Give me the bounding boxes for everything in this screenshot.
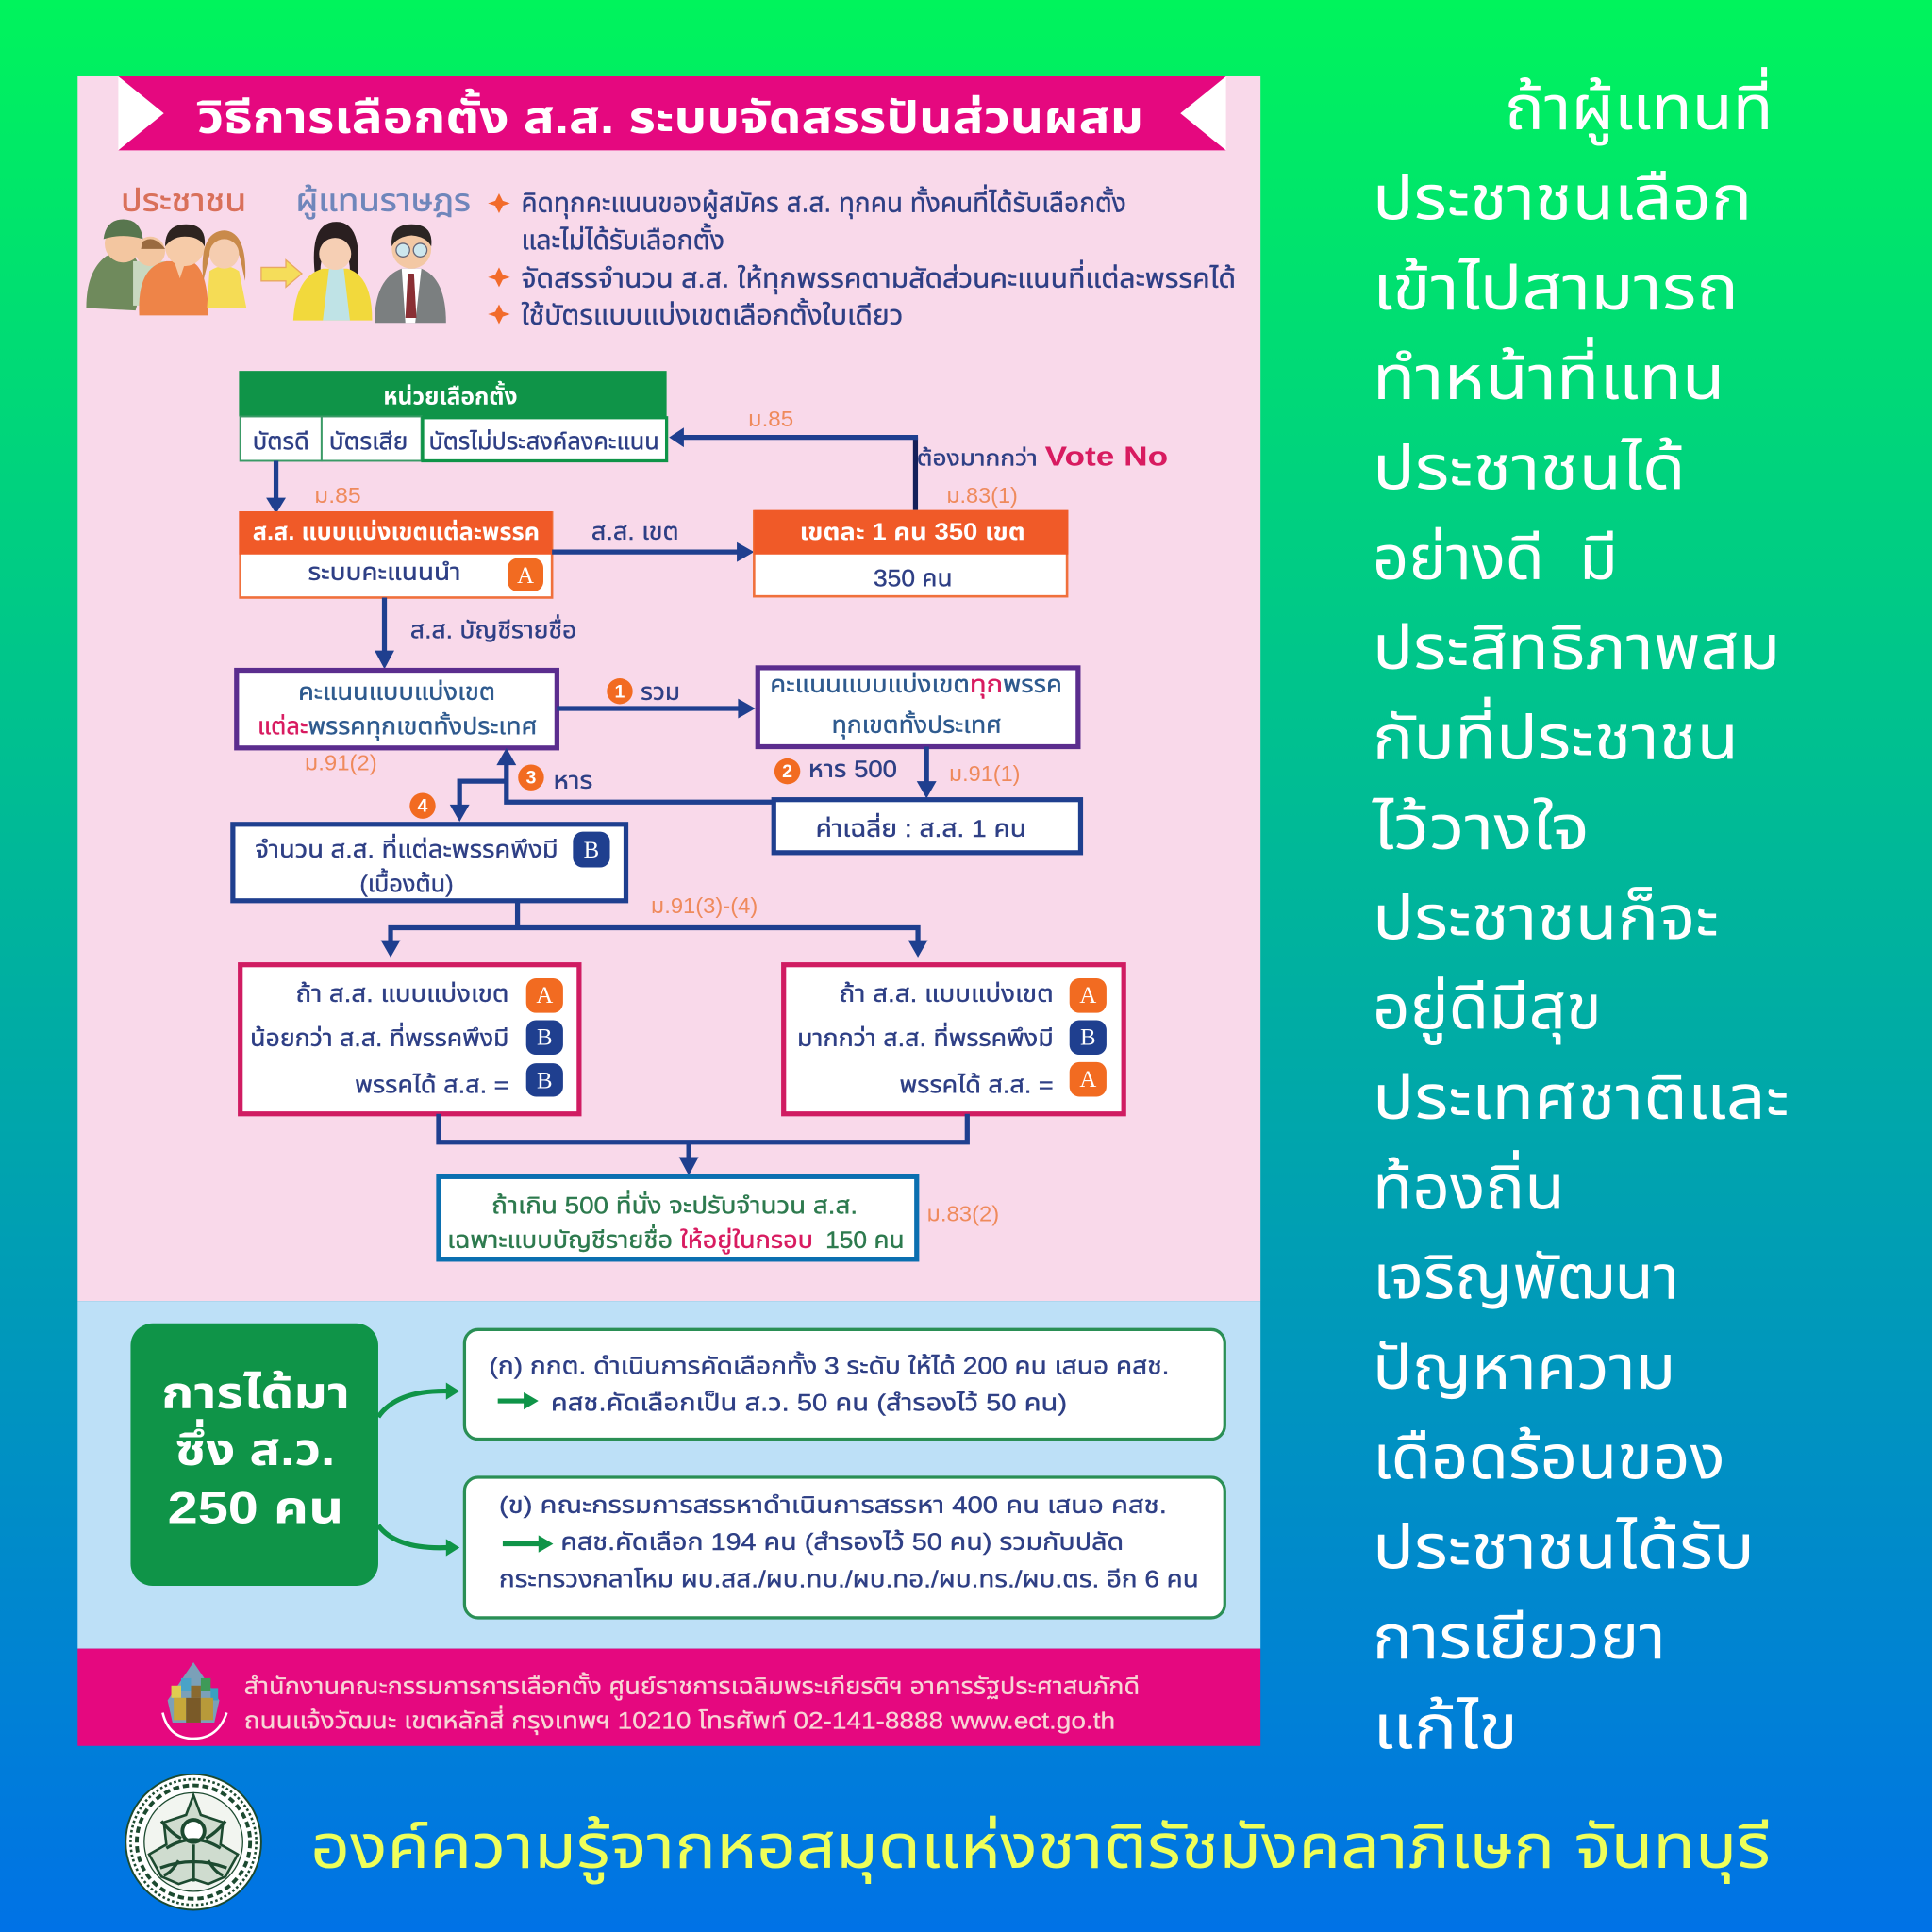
text block: right column message: อย่างดี มี <box>1373 524 1618 592</box>
label: constituency MP: ส.ส. เขต <box>591 520 679 545</box>
box: polling unit: บัตรเสีย <box>329 430 408 456</box>
panel: senate selection <box>77 1301 1260 1649</box>
box: fewer than entitled: พรรคได้ ส.ส. = <box>355 1074 508 1099</box>
arrow: to no-vote ballots <box>669 427 918 510</box>
arrow: to party-list <box>375 597 394 669</box>
arrow: average back to party votes and down <box>450 748 774 822</box>
box: entitled seats: จำนวน ส.ส. ที่แต่ละพรรคพึงมี <box>255 833 558 863</box>
box: average: ค่าเฉลี่ย : ส.ส. 1 คน <box>816 812 1026 842</box>
box: more than entitled: มากกว่า ส.ส. ที่พรรคพึงมี <box>797 1022 1054 1052</box>
box: more than entitled: ถ้า ส.ส. แบบแบ่งเขต <box>839 981 1054 1008</box>
icon: election commission logo <box>162 1662 226 1739</box>
text block: right column message: เดือดร้อนของ <box>1373 1423 1725 1491</box>
box: constituency MPs: A <box>517 563 534 589</box>
box: more than entitled <box>784 965 1124 1114</box>
label: must exceed vote no: ต้องมากกว่า <box>917 446 1038 471</box>
text block: right column message: ประชาชนได้รับ <box>1373 1513 1755 1582</box>
text block: right column message: กับที่ประชาชน <box>1373 697 1739 773</box>
box: party votes nationwide: พรรคทุกเขตทั้งประเทศ <box>308 711 537 741</box>
senate heading box: ซึ่ง ส.ว. <box>175 1419 335 1474</box>
text block: right column message: ไว้วางใจ <box>1372 793 1590 862</box>
arrow: sum <box>557 699 756 718</box>
box: fewer than entitled: ถ้า ส.ส. แบบแบ่งเขต <box>295 981 508 1008</box>
step 2 label: หาร 500 <box>808 758 897 783</box>
box: average <box>774 800 1080 853</box>
step 3 label: หาร <box>553 769 592 794</box>
text block: right column message: ประชาชนก็จะ <box>1373 883 1719 952</box>
box: option b: (ข) คณะกรรมการสรรหาดำเนินการสรรหา 400 คน เสนอ คสช. <box>499 1493 1167 1519</box>
box: constituency MPs <box>239 511 552 597</box>
box: more than entitled: B <box>1080 1025 1096 1051</box>
arrow: split two cases <box>381 901 928 958</box>
box: all party votes: พรรค <box>1003 673 1062 698</box>
step 3 label: 3 <box>525 768 536 789</box>
bullet list: ใช้บัตรแบบแบ่งเขตเลือกตั้งใบเดียว <box>521 298 903 331</box>
box: polling unit: หน่วยเลือกตั้ง <box>383 380 518 409</box>
text block: right column message: ท้องถิ่น <box>1373 1150 1565 1222</box>
box: constituency MPs: ระบบคะแนนนำ <box>308 560 460 586</box>
box: option a: คสช.คัดเลือกเป็น ส.ว. 50 คน (สำรองไว้ 50 คน) <box>551 1391 1067 1417</box>
bullet list <box>488 185 1236 331</box>
box: option b: กระทรวงกลาโหม ผบ.สส./ผบ.ทบ./ผบ.ทอ./ผบ.ทร./ผบ.ตร. อีก 6 คน <box>499 1567 1199 1592</box>
box: 500 seat adjustment: 150 คน <box>825 1228 905 1254</box>
label: must exceed vote no: Vote No <box>1045 442 1168 473</box>
box: fewer than entitled: น้อยกว่า ส.ส. ที่พรรคพึงมี <box>250 1022 508 1052</box>
label: party-list MPs: ส.ส. บัญชีรายชื่อ <box>410 614 576 644</box>
box: 500 seat adjustment: ถ้าเกิน 500 ที่นั่ง จะปรับจำนวน ส.ส. <box>491 1190 858 1220</box>
arrow: polling unit down <box>266 460 286 514</box>
box: fewer than entitled: B <box>537 1068 553 1093</box>
text block: right column message: ถ้าผู้แทนที่ <box>1505 67 1774 146</box>
box: 500 seat adjustment <box>439 1176 917 1259</box>
box: more than entitled: พรรคได้ ส.ส. = <box>899 1074 1054 1099</box>
title banner <box>118 76 1226 150</box>
label: section 85 lower: ม.85 <box>314 483 361 508</box>
text block: right column message: ประชาชนเลือก <box>1373 163 1752 232</box>
label: section 83(2): ม.83(2) <box>926 1201 999 1225</box>
step 4 badge: 4 <box>418 796 428 817</box>
box: 350 seats: 350 คน <box>874 567 953 592</box>
box: constituency MPs: ส.ส. แบบแบ่งเขตแต่ละพรรค <box>253 519 540 545</box>
arrow: divide by 500 <box>917 747 937 798</box>
icon: yellow arrow <box>261 260 302 287</box>
box: fewer than entitled: B <box>537 1025 553 1051</box>
label: section 91(2): ม.91(2) <box>305 750 377 774</box>
arrow: merge cases <box>439 1114 967 1175</box>
icon: library seal <box>125 1774 261 1909</box>
panel: footer: ถนนแจ้งวัฒนะ เขตหลักสี่ กรุงเทพฯ 10210 โทรศัพท์ 02-141-8888 www.ect.go.th <box>244 1704 1115 1735</box>
step 1 label: 1 <box>615 681 625 702</box>
label: section 91(1): ม.91(1) <box>949 761 1020 786</box>
box: option b: คสช.คัดเลือก 194 คน (สำรองไว้ 50 คน) รวมกับปลัด <box>560 1530 1124 1556</box>
label: section 91(3)-(4): ม.91(3)-(4) <box>651 893 758 918</box>
box: fewer than entitled: A <box>536 983 553 1008</box>
step 1 label: รวม <box>641 680 680 706</box>
text block: right column message: เข้าไปสามารถ <box>1373 254 1739 323</box>
text block: right column message: การเยียวยา <box>1373 1603 1666 1672</box>
heading: representatives: ผู้แทนราษฎร <box>295 182 471 219</box>
bullet list: คิดทุกคะแนนของผู้สมัคร ส.ส. ทุกคน ทั้งคนที่ได้รับเลือกตั้ง <box>521 185 1126 220</box>
box: all party votes: คะแนนแบบแบ่งเขต <box>770 672 970 698</box>
footer credit: องค์ความรู้จากหอสมุดแห่งชาติรัชมังคลาภิเษก จันทบุรี <box>310 1812 1771 1885</box>
text block: right column message: ประชาชนได้ <box>1373 434 1686 503</box>
panel: footer: สำนักงานคณะกรรมการการเลือกตั้ง ศูนย์ราชการเฉลิมพระเกียรติฯ อาคารรัฐประศาสนภักดี <box>244 1671 1140 1701</box>
step 3 label <box>518 764 592 794</box>
box: polling unit: บัตรดี <box>253 430 309 456</box>
box: polling unit <box>239 371 667 460</box>
label: must exceed vote no <box>917 442 1168 473</box>
box: fewer than entitled <box>241 965 579 1114</box>
senate heading box: 250 คน <box>168 1482 343 1532</box>
bullet list: จัดสรรจำนวน ส.ส. ให้ทุกพรรคตามสัดส่วนคะแนนที่แต่ละพรรคได้ <box>521 259 1236 293</box>
panel: footer <box>77 1649 1260 1746</box>
box: polling unit: บัตรไม่ประสงค์ลงคะแนน <box>429 429 659 456</box>
illustration: representatives <box>293 222 446 323</box>
heading: citizens: ประชาชน <box>121 182 246 217</box>
illustration: citizens group <box>86 219 246 315</box>
box: more than entitled: A <box>1079 983 1096 1008</box>
panel: election poster <box>77 76 1260 1301</box>
senate heading box: การได้มา <box>161 1368 350 1418</box>
step 1 label <box>607 678 680 706</box>
box: 500 seat adjustment: เฉพาะแบบบัญชีรายชื่อ <box>447 1224 673 1254</box>
box: 500 seat adjustment: ให้อยู่ในกรอบ <box>680 1227 813 1255</box>
text block: right column message <box>1372 67 1789 1761</box>
box: entitled seats <box>233 824 626 901</box>
box: party votes nationwide: คะแนนแบบแบ่งเขต <box>298 679 495 706</box>
text block: right column message: ทำหน้าที่แทน <box>1373 337 1725 412</box>
box: option a <box>464 1329 1224 1440</box>
step 2 label <box>774 758 897 784</box>
box: entitled seats: B <box>584 838 599 863</box>
step 2 label: 2 <box>782 761 792 782</box>
box: entitled seats: (เบื้องต้น) <box>359 868 454 898</box>
text block: right column message: ประสิทธิภาพสม <box>1373 613 1780 682</box>
step 4 badge <box>409 792 436 819</box>
title banner: วิธีการเลือกตั้ง ส.ส. ระบบจัดสรรปันส่วนผสม <box>196 89 1143 142</box>
box: option a: (ก) กกต. ดำเนินการคัดเลือกทั้ง 3 ระดับ ให้ได้ 200 คน เสนอ คสช. <box>490 1351 1170 1379</box>
box: all party votes: ทุกเขตทั้งประเทศ <box>832 710 1002 740</box>
box: 350 seats: เขตละ 1 คน 350 เขต <box>800 520 1025 545</box>
label: section 85: ม.85 <box>748 407 793 431</box>
text block: right column message: เจริญพัฒนา <box>1373 1243 1679 1312</box>
box: party votes nationwide: แต่ละ <box>258 713 308 740</box>
label: section 83(1): ม.83(1) <box>946 483 1018 508</box>
box: more than entitled: A <box>1079 1067 1096 1092</box>
box: party votes nationwide <box>237 671 557 748</box>
box: all party votes: ทุก <box>970 673 1003 699</box>
arrow: curved to option b <box>378 1525 459 1557</box>
senate heading box <box>130 1324 378 1586</box>
arrow: to constituency seats <box>552 542 754 562</box>
text block: right column message: แก้ไข <box>1373 1692 1518 1761</box>
box: all party votes <box>758 668 1078 747</box>
text block: right column message: ประเทศชาติและ <box>1373 1063 1789 1132</box>
arrow: curved to option a <box>378 1382 459 1417</box>
box: 350 seats <box>754 510 1068 596</box>
box: option b <box>464 1477 1224 1618</box>
text block: right column message: อยู่ดีมีสุข <box>1373 974 1602 1046</box>
text block: right column message: ปัญหาความ <box>1373 1333 1675 1402</box>
bullet list: และไม่ได้รับเลือกตั้ง <box>521 223 724 256</box>
